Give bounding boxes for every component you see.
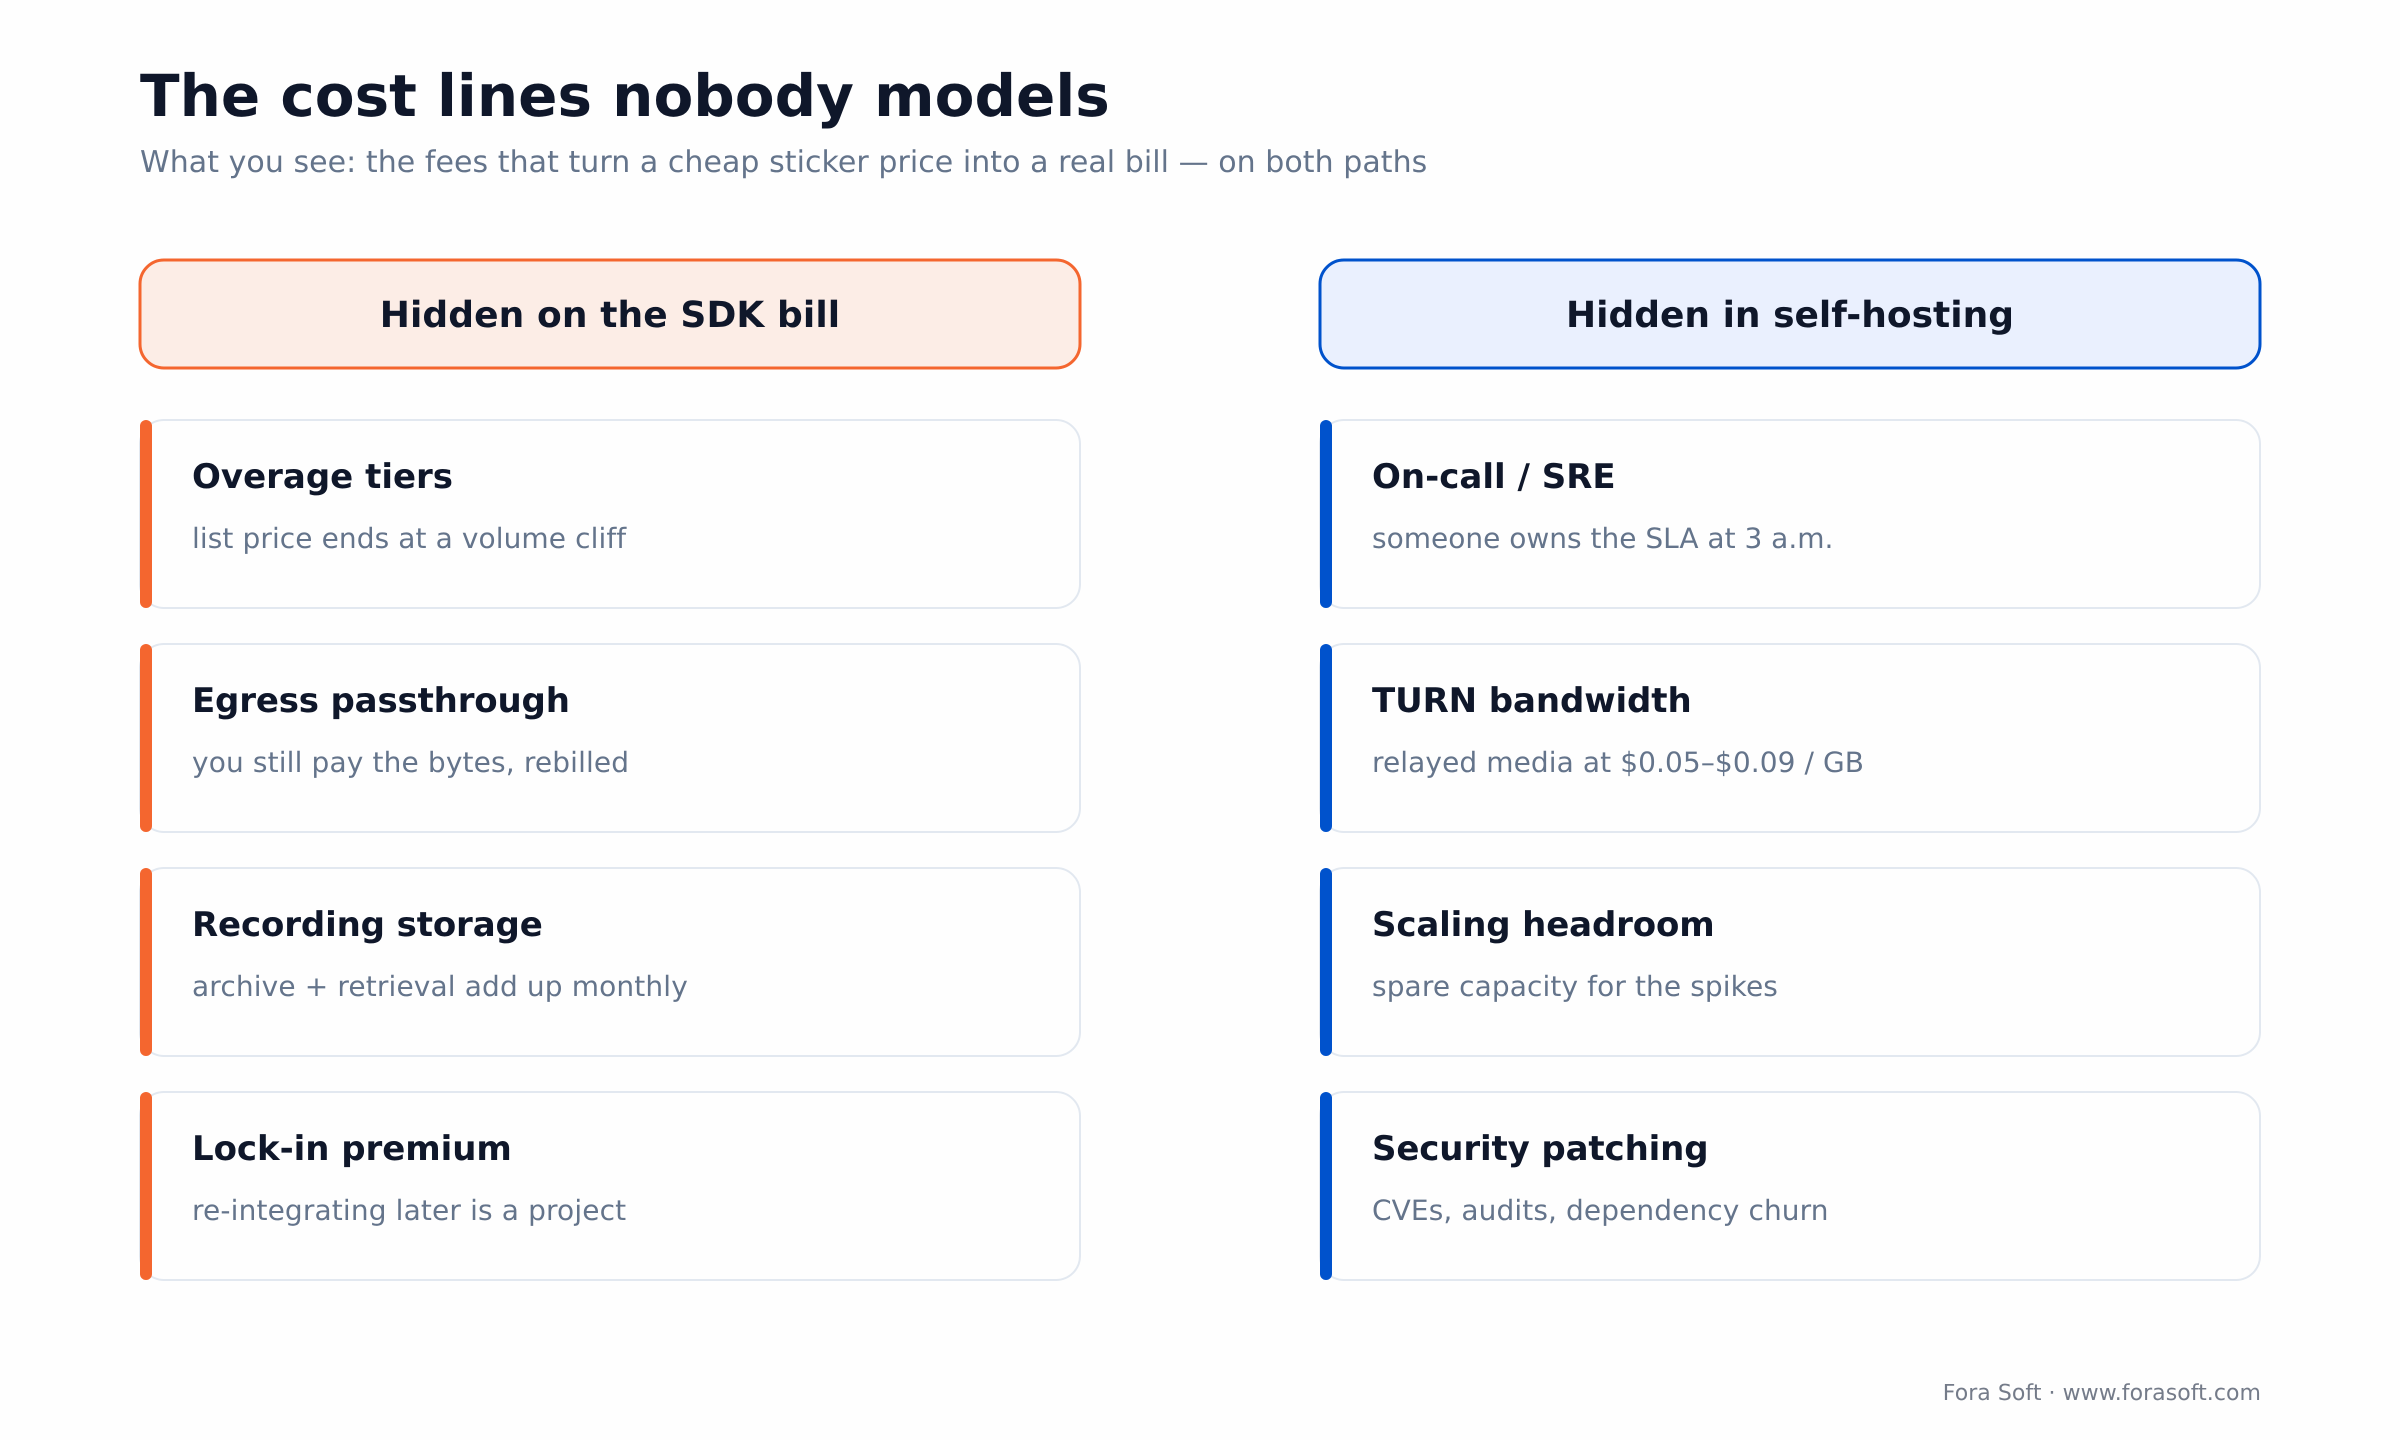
card: Egress passthrough: Egress passthrough [192, 681, 570, 721]
card: Overage tiers: Overage tiers [192, 457, 453, 497]
card: Recording storage [140, 868, 1080, 1056]
card: Overage tiers [140, 420, 1080, 608]
footer credit: Fora Soft · www.forasoft.com [1943, 1381, 2261, 1406]
card: Lock-in premium [140, 1092, 1080, 1280]
card: TURN bandwidth: relayed media at $0.05–$0.09 / GB [1372, 746, 1864, 779]
card: Scaling headroom: spare capacity for the spikes [1372, 970, 1778, 1003]
card: Security patching [1320, 1092, 2260, 1280]
card: TURN bandwidth [1320, 644, 2260, 832]
card: Lock-in premium: re-integrating later is a project [192, 1194, 626, 1227]
card: On-call / SRE [1320, 420, 2260, 608]
card: Security patching: CVEs, audits, dependency churn [1372, 1194, 1829, 1227]
card: Scaling headroom: Scaling headroom [1372, 905, 1714, 945]
card: Egress passthrough: you still pay the bytes, rebilled [192, 746, 629, 779]
card: Egress passthrough [140, 644, 1080, 832]
panel: self-hosting column [1320, 260, 2260, 1280]
card: Lock-in premium: Lock-in premium [192, 1129, 512, 1169]
card: Scaling headroom [1320, 868, 2260, 1056]
card: TURN bandwidth: TURN bandwidth [1372, 681, 1692, 721]
card: Recording storage: Recording storage [192, 905, 543, 945]
card: Security patching: Security patching [1372, 1129, 1708, 1169]
title: The cost lines nobody models [140, 62, 1110, 130]
card: Overage tiers: list price ends at a volume cliff [192, 522, 627, 555]
subtitle: What you see: the fees that turn a cheap sticker price into a real bill — on both paths [140, 145, 1427, 180]
heading: Hidden on the SDK bill [140, 260, 1080, 368]
card: Recording storage: archive + retrieval add up monthly [192, 970, 688, 1003]
heading: Hidden in self-hosting [1320, 260, 2260, 368]
heading: Hidden in self-hosting: Hidden in self-hosting [1566, 295, 2014, 336]
card: On-call / SRE: On-call / SRE [1372, 457, 1616, 497]
panel: SDK bill column [140, 260, 1080, 1280]
card: On-call / SRE: someone owns the SLA at 3 a.m. [1372, 522, 1833, 555]
heading: Hidden on the SDK bill: Hidden on the SDK bill [380, 295, 840, 336]
